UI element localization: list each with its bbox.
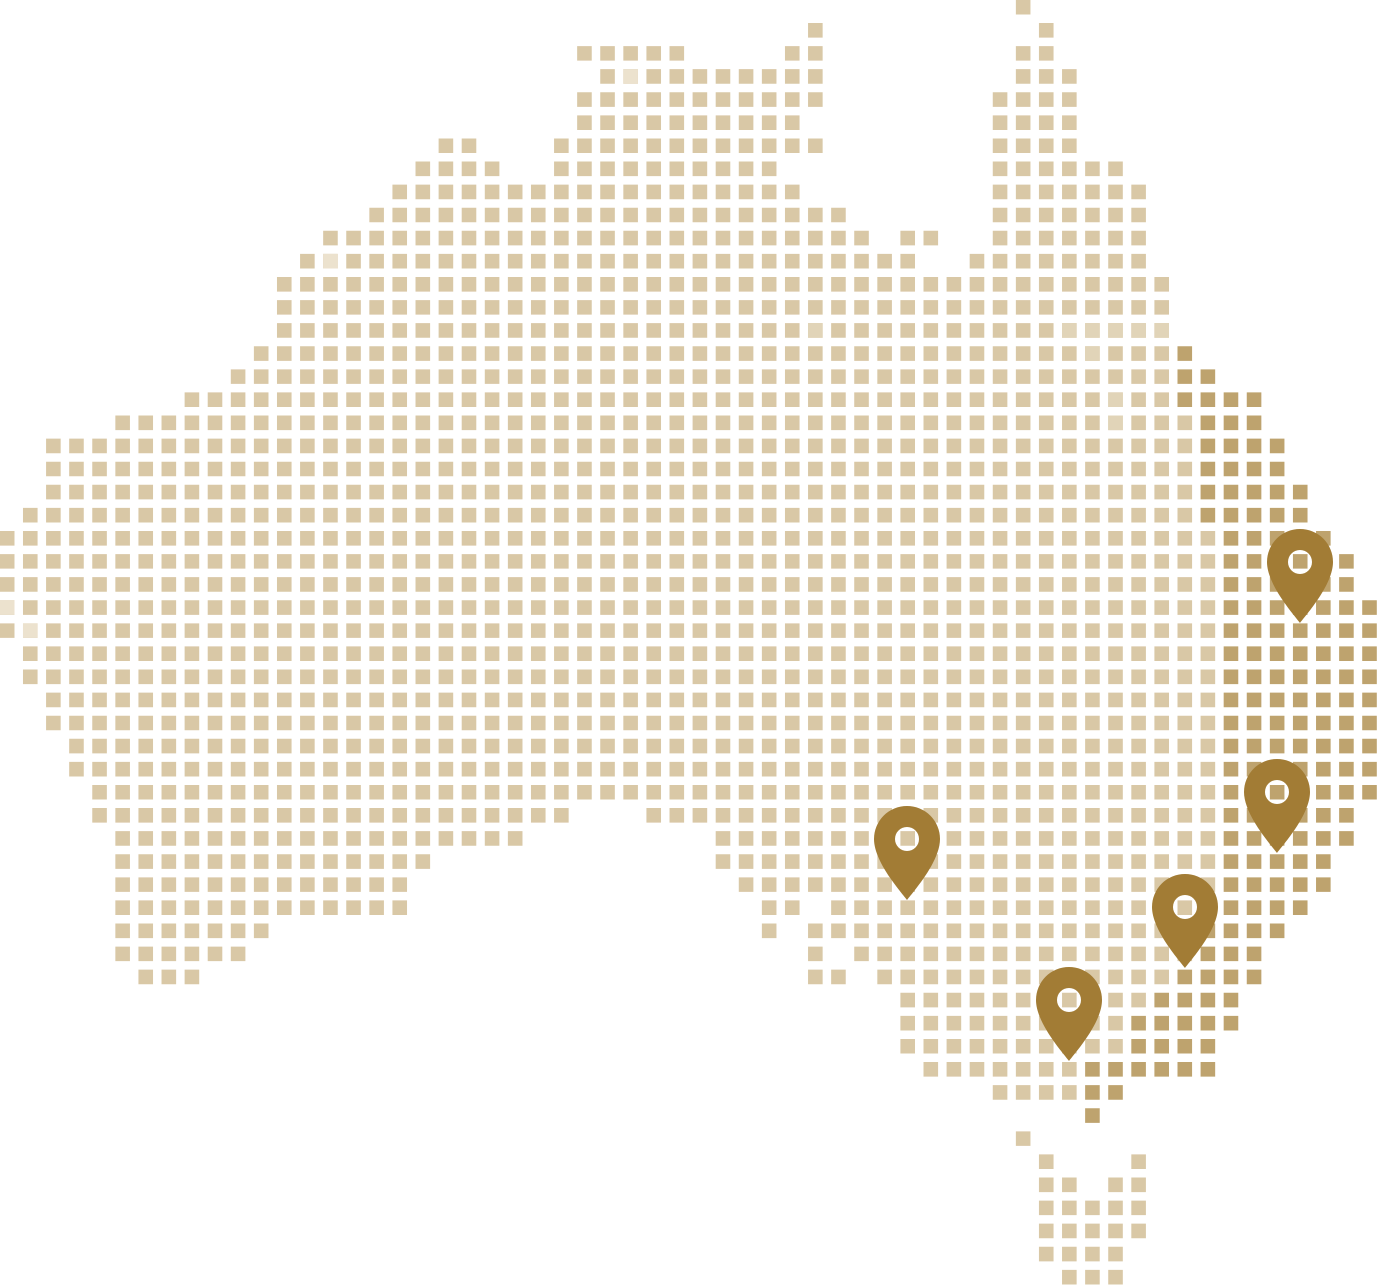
map region: very faded squares [0, 76, 639, 631]
icon: pin inland New South Wales [1152, 874, 1218, 968]
map region: east coast darker squares [1085, 354, 1378, 1116]
icon: pin Sydney area [1244, 759, 1310, 853]
icon: pin Melbourne area [1036, 967, 1102, 1061]
location pins [874, 529, 1333, 1061]
icon: pin Adelaide area [874, 806, 940, 900]
map region: slightly faded squares [808, 330, 1171, 423]
icon: pin Brisbane area [1267, 529, 1333, 623]
